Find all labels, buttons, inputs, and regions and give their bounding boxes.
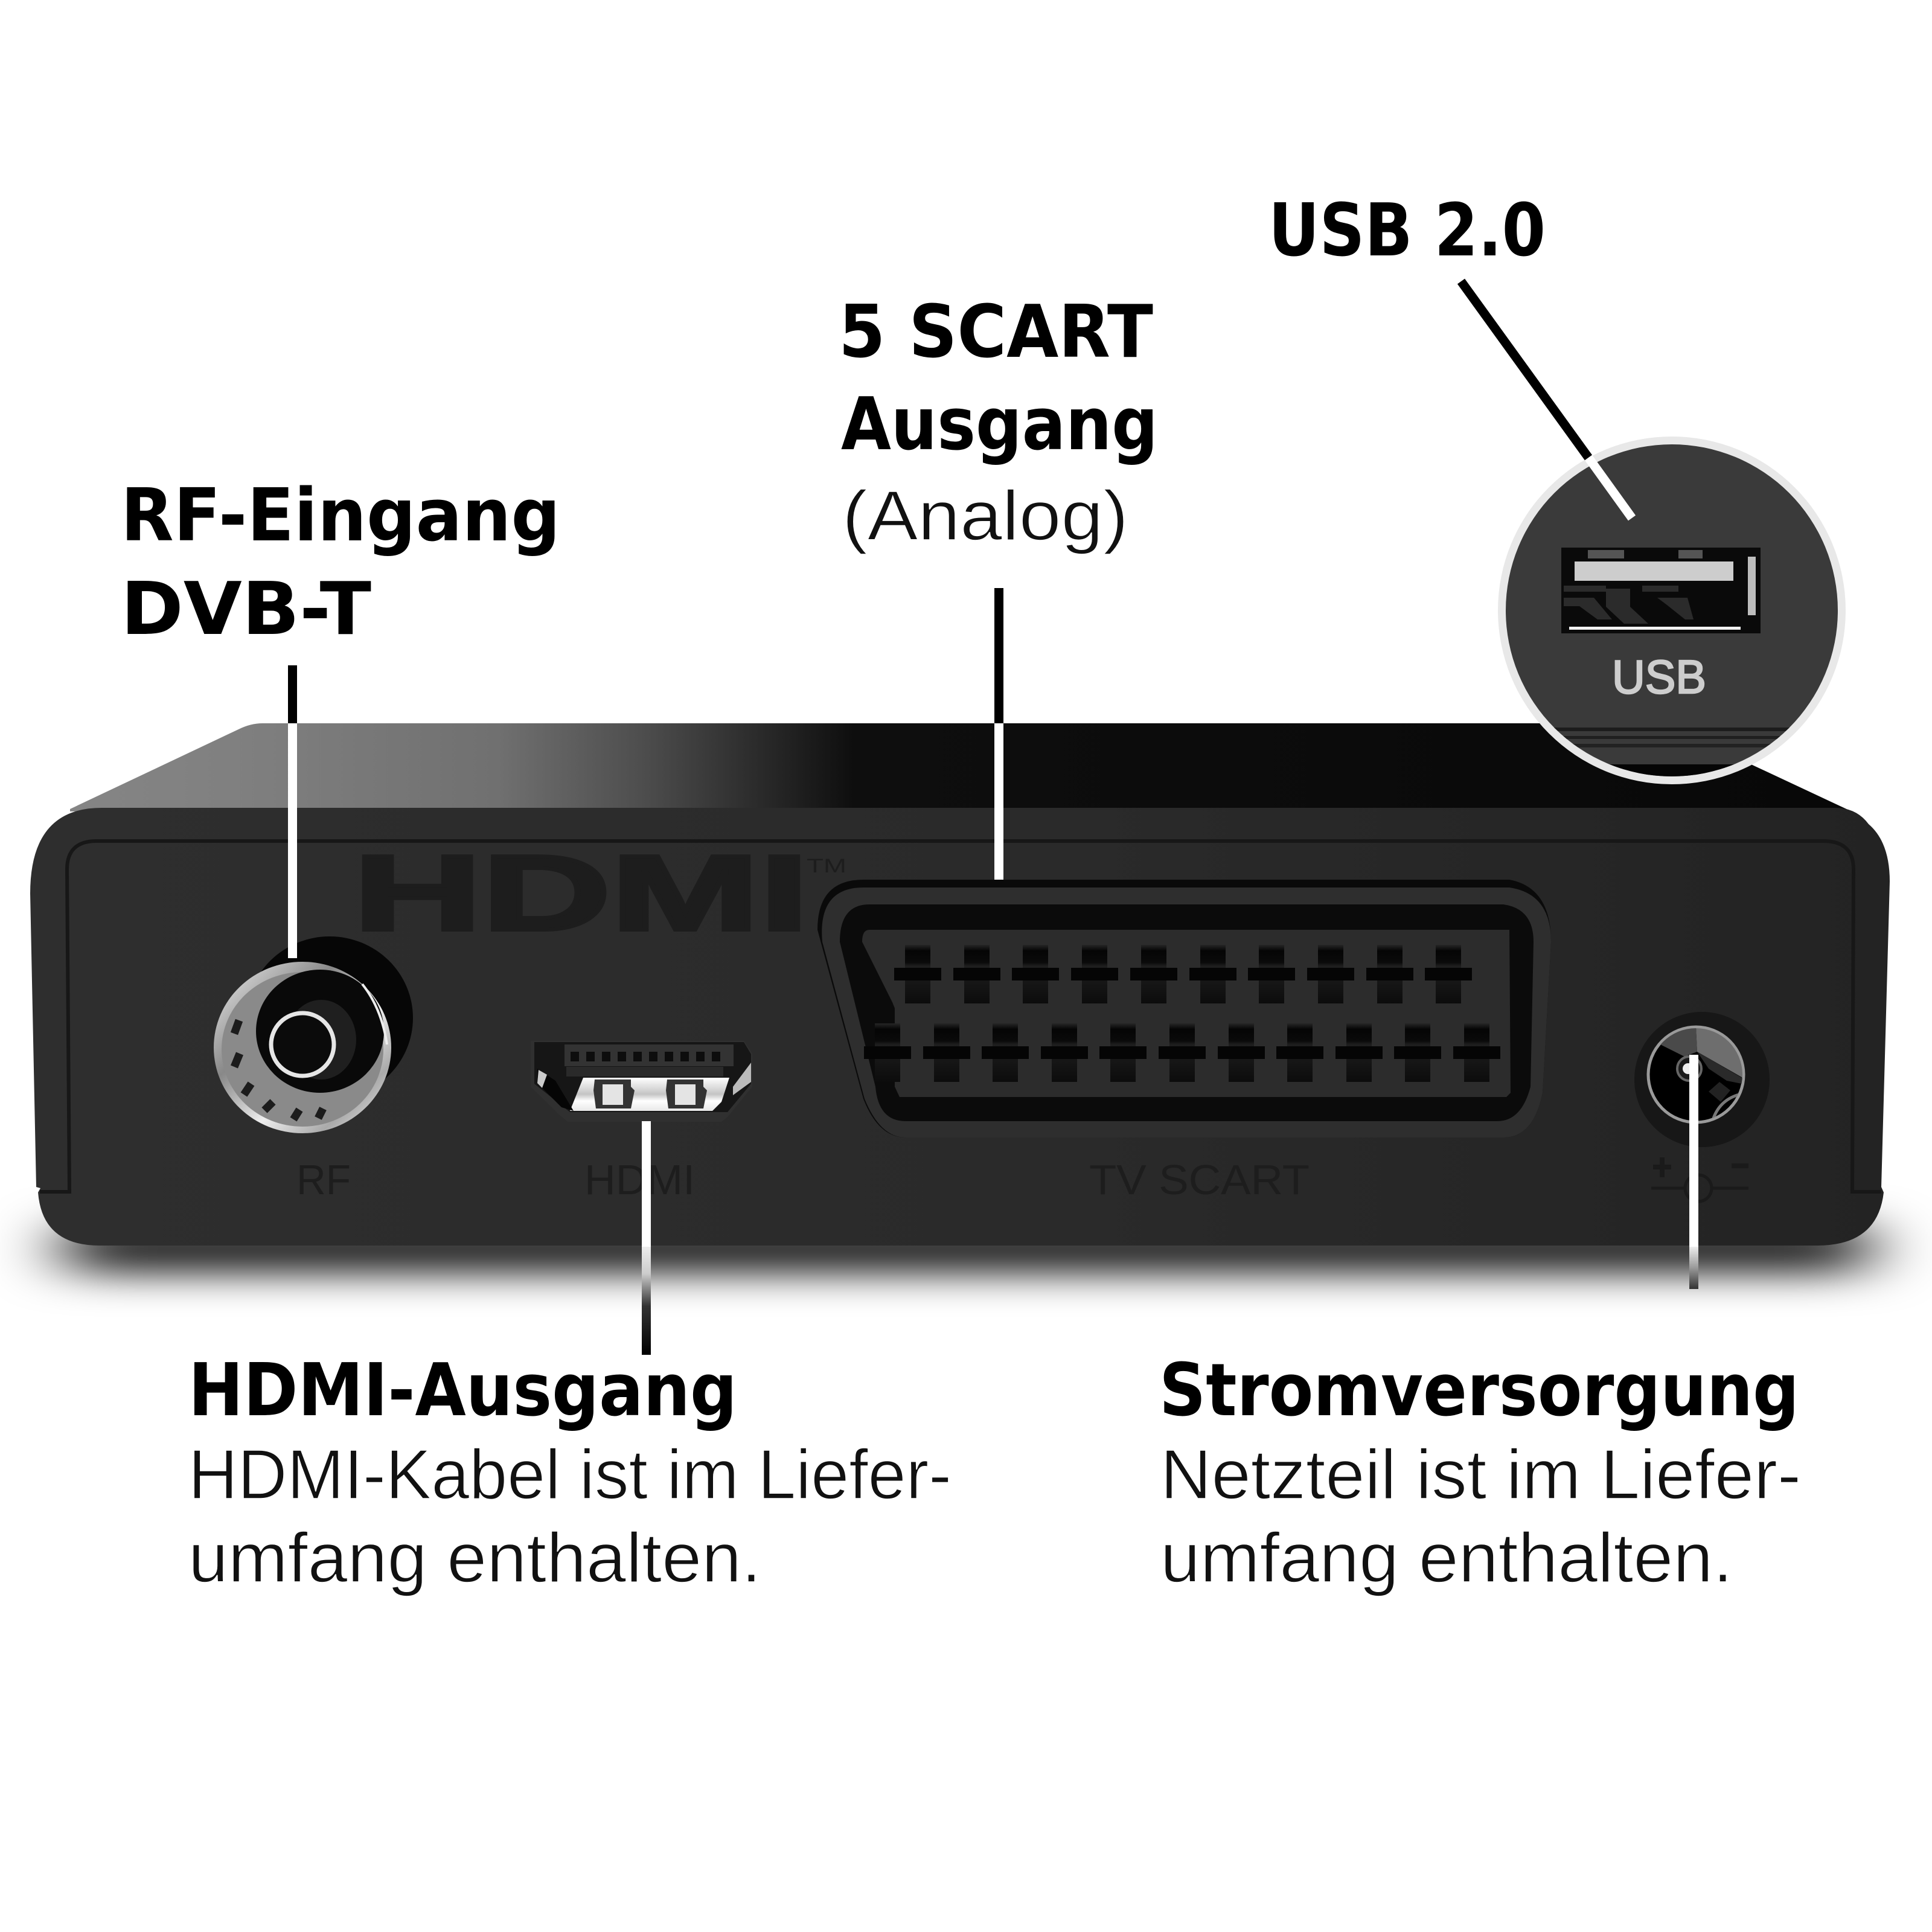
text block: Stromversorgung: Stromversorgung — [1159, 1349, 1799, 1433]
heading: USB 2.0: USB 2.0 — [1268, 189, 1546, 273]
heading: RF-Eingang DVB-T — [121, 474, 560, 651]
RF label: RF — [296, 1156, 351, 1203]
text block: HDMI-Ausgang: HDMI-Ausgang — [188, 1349, 737, 1433]
text block: Stromversorgung: Netzteil ist im Liefer- — [1160, 1435, 1801, 1514]
SCART connector — [817, 880, 1551, 1137]
text block: Stromversorgung — [1159, 1349, 1801, 1597]
heading: 5 SCART Ausgang (Analog) — [839, 290, 1158, 555]
leader line: RF — [288, 665, 297, 958]
heading: 5 SCART Ausgang (Analog): Ausgang — [841, 383, 1158, 467]
USB inset bottom edge lines — [1554, 728, 1790, 776]
USB label: USB — [1612, 650, 1706, 703]
heading: RF-Eingang DVB-T: RF-Eingang — [121, 474, 560, 558]
USB port socket — [1561, 548, 1761, 633]
heading: RF-Eingang DVB-T: DVB-T — [121, 568, 371, 651]
leader line: HDMI — [642, 1121, 651, 1355]
leader line: power — [1689, 1055, 1698, 1289]
text block: HDMI-Ausgang — [188, 1349, 952, 1597]
front panel — [30, 808, 1890, 1246]
HDMI port — [531, 1041, 752, 1122]
device: receiver body — [30, 723, 1890, 1271]
RF connector — [214, 936, 413, 1133]
inset: USB port magnifier — [1497, 437, 1847, 784]
text block: HDMI-Ausgang: umfang enthalten. — [188, 1518, 761, 1597]
SCART pins, upper row — [894, 945, 1472, 1003]
floor shadow — [66, 1226, 1866, 1271]
heading: 5 SCART Ausgang (Analog): (Analog) — [842, 476, 1128, 555]
trademark mark: TM — [807, 855, 846, 877]
top face of the receiver — [70, 723, 1852, 811]
SCART pins, lower row — [864, 1023, 1500, 1082]
HDMI logo: HDMI — [353, 833, 809, 953]
polarity symbol — [1651, 1157, 1748, 1201]
leader line: SCART — [994, 588, 1003, 880]
leader line: USB — [1461, 281, 1632, 518]
text block: HDMI-Ausgang: HDMI-Kabel ist im Liefer- — [188, 1435, 952, 1514]
power jack — [1634, 1012, 1770, 1147]
TV SCART label: TV SCART — [1089, 1156, 1310, 1203]
HDMI label: HDMI — [584, 1156, 695, 1203]
front panel inset line — [40, 841, 1881, 1192]
heading: 5 SCART Ausgang (Analog): 5 SCART — [839, 290, 1153, 374]
text block: Stromversorgung: umfang enthalten. — [1160, 1518, 1733, 1597]
